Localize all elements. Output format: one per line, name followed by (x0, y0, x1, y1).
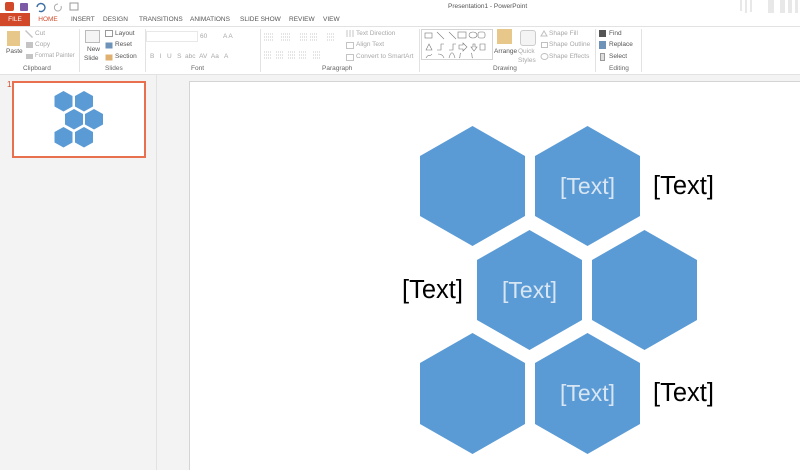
icon: new slide (85, 30, 100, 43)
paragraph group (264, 30, 414, 72)
clipboard group: Clipboard (23, 65, 51, 72)
editing group: Editing (609, 65, 629, 72)
slide number: 1 (7, 80, 11, 89)
paragraph group: Text Direction (356, 30, 395, 37)
thumbnail pane divider (156, 74, 157, 470)
paragraph group: Paragraph (322, 65, 352, 72)
slides group: New (87, 46, 100, 53)
paragraph buttons (264, 34, 334, 58)
ribbon (0, 26, 800, 75)
tab labels: VIEW (323, 16, 340, 23)
home tab: HOME (38, 16, 58, 23)
tab labels: INSERT (71, 16, 95, 23)
slides group: Section (115, 53, 137, 60)
drawing group: Shape Effects (549, 53, 589, 60)
hexagon: middle right (592, 230, 697, 350)
hexagon: bottom left (420, 333, 525, 454)
icon: quick styles (520, 30, 536, 46)
icon: paste (7, 31, 20, 46)
icon: arrange (497, 29, 512, 44)
label: bottom right: [Text] (653, 379, 714, 407)
tab labels: TRANSITIONS (139, 16, 183, 23)
clipboard group: Paste (6, 48, 23, 55)
shapes gallery (421, 29, 493, 60)
drawing group: Quick (518, 48, 535, 55)
drawing group: Drawing (493, 65, 517, 72)
icons: text direction, align, smartart (346, 30, 354, 61)
tab labels: REVIEW (289, 16, 315, 23)
editing group: Find (609, 30, 622, 37)
icons: shape fill outline effects (540, 30, 548, 60)
slides group: Reset (115, 41, 132, 48)
slides group: Slide (84, 55, 98, 62)
window title: Presentation1 - PowerPoint (448, 3, 527, 10)
drawing group (421, 29, 590, 72)
icon: select (600, 53, 605, 61)
font group: 60 (200, 33, 207, 40)
icon: PowerPoint logo (5, 2, 14, 11)
hexagon: bottom right: [Text] (560, 380, 615, 406)
paragraph group: Align Text (356, 41, 384, 48)
hexagon: bottom right (535, 333, 640, 454)
ribbon group dividers (79, 29, 80, 72)
tab labels: ANIMATIONS (190, 16, 230, 23)
clipboard group (6, 30, 75, 72)
icon: replace (599, 41, 606, 49)
font selector (146, 31, 198, 42)
slides group (84, 30, 137, 72)
drawing group: Styles (518, 57, 536, 64)
clipboard group: Copy (35, 41, 50, 48)
tab labels: SLIDE SHOW (240, 16, 281, 23)
hexagon: top right: [Text] (560, 173, 615, 199)
tab labels (71, 16, 340, 23)
tab labels: DESIGN (103, 16, 128, 23)
drawing group: Arrange (494, 48, 517, 55)
font group: A A (223, 33, 233, 40)
font group: Font (191, 65, 204, 72)
clipboard group: Cut (35, 30, 45, 37)
drawing group: Shape Outline (549, 41, 590, 48)
editing group: Replace (609, 41, 633, 48)
editing group (599, 30, 633, 72)
slides group: Slides (105, 65, 123, 72)
slide thumbnail (12, 81, 146, 158)
slide canvas (189, 81, 800, 470)
label: middle left: [Text] (402, 276, 463, 304)
file tab: FILE (8, 16, 22, 23)
thumbnail hexagons (54, 91, 103, 148)
font group (146, 31, 233, 72)
icons: layout reset section (105, 30, 113, 60)
paragraph group: Convert to SmartArt (356, 53, 413, 60)
hexagon: middle left: [Text] (502, 277, 557, 303)
font group: B I U S abc AV Aa A (150, 53, 228, 60)
clipboard group: Format Painter (35, 53, 75, 59)
editing group: Select (609, 53, 627, 60)
title bar (0, 0, 800, 26)
icon: find (599, 30, 606, 37)
file tab (0, 13, 30, 26)
icons: cut copy painter (25, 30, 33, 59)
slides group: Layout (115, 30, 135, 37)
decorative corner stripes (740, 0, 798, 13)
hexagon: top right (535, 126, 640, 246)
hexagon: middle left (477, 230, 582, 350)
ribbon tabs (0, 13, 800, 26)
icon: save (20, 3, 28, 11)
hexagon: top left (420, 126, 525, 246)
label: top right: [Text] (653, 172, 714, 200)
drawing group: Shape Fill (549, 30, 578, 37)
quick access icons (36, 2, 78, 12)
